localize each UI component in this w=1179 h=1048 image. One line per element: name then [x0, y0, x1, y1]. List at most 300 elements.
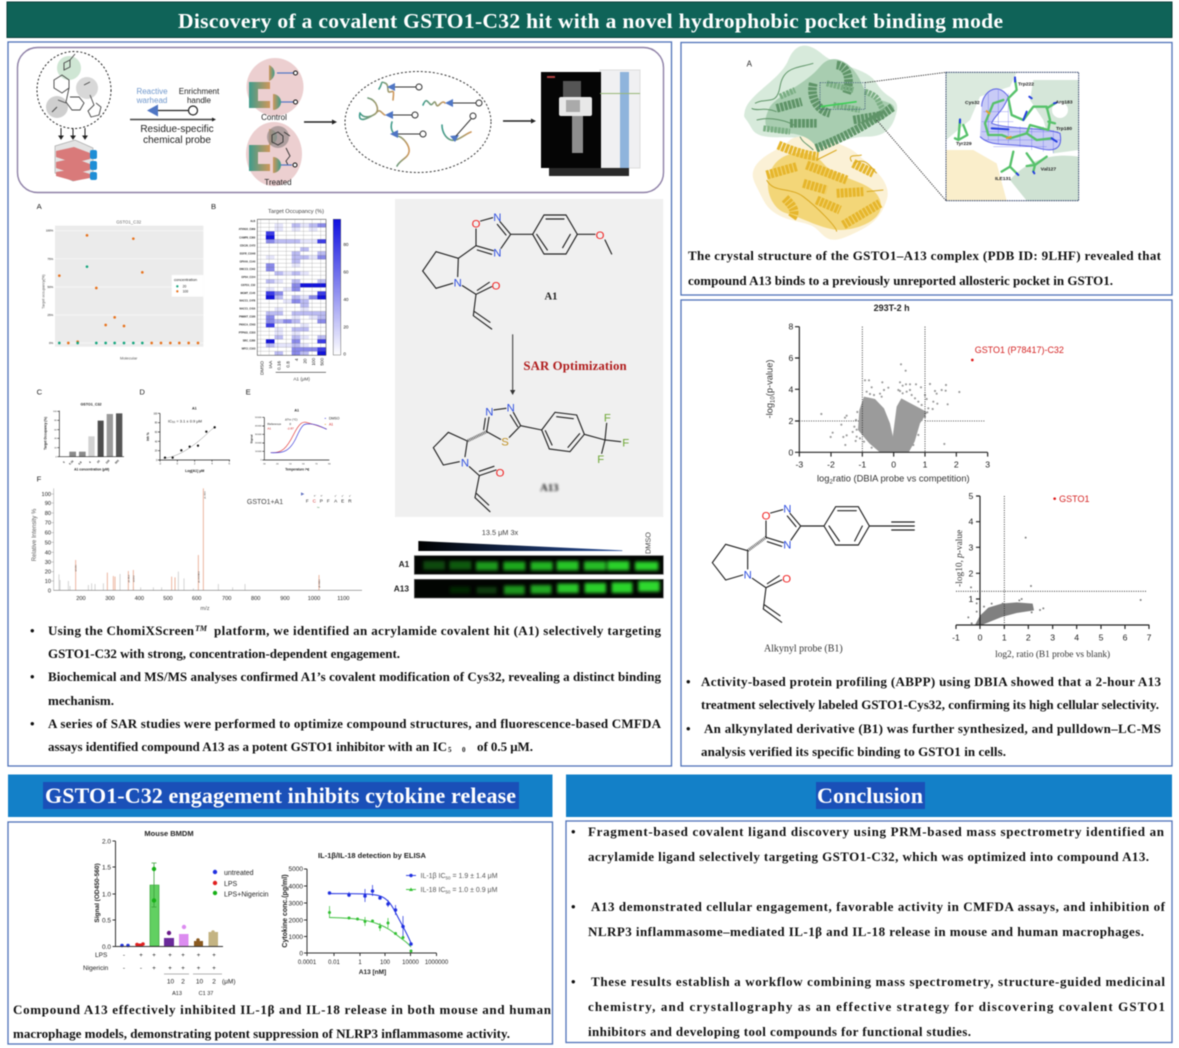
bar chart: Mouse BMDM: 2 — [212, 978, 216, 986]
volcano plot: 293T-2 h: -3 — [795, 460, 803, 470]
bar chart: Mouse BMDM — [83, 829, 269, 997]
scatter plot A: 50% — [47, 285, 54, 289]
thermal shift chart E: 400000 — [255, 426, 263, 428]
dose-response chart D: 4 — [211, 464, 213, 466]
bar chart C: 0.16 — [68, 459, 75, 466]
peptide sequence: y* — [335, 496, 337, 498]
panel: crystal structure: A — [747, 60, 753, 69]
caption: cytokine release: macrophage models, demonstrating potent suppression of NLRP3 inflammasome activity. — [13, 1026, 510, 1041]
bar chart C: 80 — [54, 420, 57, 422]
fluorescence gel: A13 — [394, 583, 409, 593]
legend: concentration: 100 — [183, 290, 188, 294]
conclusion bullets: acrylamide ligand selectively targeting GSTO1-C32, which was optimized into compound A13. — [588, 849, 1149, 864]
bullet list: discovery findings: 0 — [462, 746, 466, 754]
bar chart: Mouse BMDM: + — [197, 952, 201, 959]
bullet list: selectivity — [686, 674, 1162, 759]
heatmap B: MGMT_C145 — [240, 292, 256, 295]
volcano plot: B1 pulldown: 4 — [969, 517, 974, 527]
dose-response chart D: 60 — [155, 432, 158, 434]
MS/MS spectrum F: 1100 — [337, 596, 349, 602]
dose-response chart D: 2 — [194, 464, 196, 466]
MS/MS spectrum F: GSTO1+A1 — [247, 499, 283, 506]
dose-response chart D: D — [139, 388, 145, 397]
MS/MS spectrum F: 1000 — [308, 596, 320, 602]
compound A1 — [423, 212, 612, 329]
volcano plot: B1 pulldown — [952, 491, 1152, 660]
thermal shift chart E: 100000 — [255, 451, 263, 453]
heatmap B: 500 — [320, 357, 325, 366]
peptide sequence: b* — [314, 496, 316, 498]
MS/MS spectrum F: 70 — [45, 521, 51, 527]
bar chart C: 0 — [62, 460, 66, 464]
MS/MS spectrum F: 200 — [76, 596, 86, 602]
bar chart C: 20 — [54, 447, 57, 449]
MS/MS spectrum F: y5+ 623.3 — [204, 491, 206, 499]
compound A13: A13 — [540, 483, 559, 494]
dose-response chart D: 0 — [156, 460, 158, 462]
bar chart: Mouse BMDM: + — [181, 952, 185, 959]
residue-specific chemical probe: warhead — [136, 96, 167, 105]
MS/MS spectrum F: 20 — [45, 570, 51, 576]
dose-response chart D: 80 — [155, 423, 158, 425]
icon: mass spectrometer — [541, 70, 640, 176]
volcano plot: B1 pulldown: 6 — [1123, 633, 1128, 643]
volcano plot: 293T-2 h: log — [817, 474, 829, 484]
inset: binding pocket: ILE131 — [995, 176, 1011, 182]
peptide sequence: P — [320, 499, 323, 504]
panel: target engagement — [681, 300, 1172, 766]
scatter plot A: 0% — [49, 341, 54, 345]
page title banner: Discovery of a covalent GSTO1-C32 hit with a novel hydrophobic pocket binding mode — [178, 9, 1003, 33]
peptide sequence: F — [306, 499, 309, 504]
volcano plot: B1 pulldown: GSTO1 — [1059, 494, 1089, 504]
inset: binding pocket: Tyr229 — [956, 141, 972, 147]
bullet list: discovery findings: platform, we identified an acrylamide covalent hit (A1) selectively targeting — [214, 623, 662, 638]
MS/MS spectrum F: 40 — [45, 550, 51, 556]
peptide sequence — [301, 492, 352, 509]
bar chart: Mouse BMDM: (μM) — [222, 978, 236, 986]
heatmap B: CAMP8_C360 — [239, 236, 256, 239]
MS/MS spectrum F: 10 — [45, 579, 51, 585]
dose-response chart D: A1 — [192, 407, 197, 411]
heatmap B: PTPN11_C333 — [239, 331, 256, 334]
fluorescence gel: 13.5 μM 3x — [482, 528, 519, 537]
heatmap B: 0.8 — [285, 361, 290, 368]
legend: concentration — [172, 275, 203, 297]
volcano plot: 293T-2 h: 3 — [985, 460, 990, 470]
heatmap B: 0.16 — [277, 361, 282, 370]
bar chart: Mouse BMDM: Nigericin — [83, 965, 109, 972]
arrows: library to cells — [59, 128, 87, 139]
caption: cytokine release — [13, 1002, 552, 1041]
treated condition — [246, 122, 302, 187]
bar chart C: 20 — [96, 459, 101, 464]
scatter plot A: 100% — [46, 229, 54, 233]
scatter plot A — [37, 202, 203, 361]
bar chart C: A1 concentration (μM) — [74, 468, 109, 472]
bar chart: Mouse BMDM: + — [168, 952, 172, 959]
MS/MS spectrum F: Relative Intensity % — [32, 508, 38, 561]
scatter plot A: A — [37, 202, 43, 211]
MS/MS spectrum F: 300 — [105, 596, 115, 602]
bar chart: Mouse BMDM: Mouse BMDM — [144, 829, 194, 838]
section header: cytokine release: GSTO1-C32 engagement inhibits cytokine release — [45, 783, 516, 808]
bullet list: selectivity: treatment selectively labeled GSTO1-Cys32, confirming its high cellular selectivity. — [701, 697, 1159, 712]
bar chart: Mouse BMDM: + — [197, 965, 201, 972]
peptide sequence: R — [348, 499, 352, 504]
dose-response chart D: 20 — [155, 451, 158, 453]
line chart: ELISA — [282, 851, 498, 976]
line chart: ELISA: 3000 — [289, 900, 303, 908]
bar chart C: 4 — [88, 460, 92, 464]
volcano plot: B1 pulldown: 3 — [1050, 633, 1055, 643]
compound A13: F — [597, 454, 604, 466]
caption: crystal structure — [688, 248, 1162, 288]
bullet list: selectivity: An alkynylated derivative (B1) was further synthesized, and pulldown–LC-MS — [704, 721, 1161, 736]
bar chart: Mouse BMDM: + — [152, 965, 156, 972]
compound A13: N — [507, 402, 515, 414]
bullet list: selectivity: Activity-based protein profiling (ABPP) using DBIA showed that a 2-hour A13 — [701, 674, 1162, 689]
section header: conclusion: Conclusion — [817, 783, 923, 808]
legend: treatment — [213, 870, 269, 898]
MS/MS spectrum F: 900 — [280, 596, 290, 602]
heatmap B: ALB — [250, 220, 256, 223]
bar chart: Mouse BMDM: C1 37 — [199, 991, 213, 997]
bar chart: Mouse BMDM: + — [168, 965, 172, 972]
line chart: ELISA: 1 — [358, 960, 362, 966]
thermal shift chart E: Signal — [250, 434, 254, 443]
heatmap B: GPS4_C154 — [241, 276, 256, 279]
bullet list: discovery findings: • — [30, 669, 35, 684]
colorbar: 40 — [343, 297, 349, 302]
bullet list: discovery findings: assays identified compound A13 as a potent GSTO1 inhibitor with an IC — [48, 739, 447, 754]
icon: stacked cell culture flasks — [55, 140, 97, 181]
dose-response chart D: 0 — [177, 464, 179, 466]
bar chart: Mouse BMDM: 10 — [196, 978, 203, 986]
inset: binding pocket: Arg183 — [1056, 99, 1073, 105]
gel row A13 — [414, 579, 663, 598]
compound A1: O — [472, 218, 481, 230]
compound A1: O — [492, 281, 501, 293]
line chart: ELISA: A13 [nM] — [359, 969, 386, 976]
MS/MS spectrum F: F — [37, 474, 42, 483]
heatmap B: PNMKT_C186 — [239, 316, 256, 319]
thermal shift chart E: 80 — [328, 464, 331, 466]
conclusion bullets: inhibitors and developing tool compounds for functional studies. — [588, 1024, 971, 1039]
caption: cytokine release: Compound A13 effectively inhibited IL-1β and IL-18 release in both mouse and human — [13, 1002, 552, 1017]
MS/MS spectrum F: 500 — [163, 596, 173, 602]
bullet list: discovery findings: of 0.5 μM. — [477, 739, 533, 754]
compound A13: F — [622, 437, 629, 449]
bar chart: Mouse BMDM: A13 — [172, 991, 182, 997]
thermal shift chart E: 70 — [315, 464, 318, 466]
control condition — [246, 58, 304, 122]
bar chart: Mouse BMDM: 10 — [167, 978, 174, 986]
conclusion bullets: • — [571, 899, 576, 914]
caption: crystal structure: compound A13 binds to a previously unreported allosteric pocket in GSTO1. — [688, 273, 1113, 288]
volcano plot: 293T-2 h: 0 — [789, 447, 794, 457]
conclusion bullets — [571, 824, 1166, 1039]
heatmap B: NACC1_C478 — [239, 300, 256, 303]
compound A13: O — [496, 467, 505, 479]
conclusion bullets: NLRP3 inflammasome–mediated IL-1β and IL-18 release in mouse and human macrophages. — [588, 924, 1144, 939]
compound A13: N — [485, 407, 493, 419]
legend: IC50: = 1.9 ± 1.4 μM — [451, 873, 498, 880]
bullet list: discovery findings: Biochemical and MS/MS analyses confirmed A1’s covalent modification of Cys32, revealing a distinct binding — [48, 669, 662, 684]
heatmap B: WFCI_C163 — [242, 347, 256, 350]
legend: IC50: 50 — [446, 876, 451, 880]
thermal shift chart E: 50 — [289, 464, 292, 466]
heatmap B: CDC26_C472 — [240, 244, 256, 247]
line chart: ELISA: 5000 — [289, 866, 303, 873]
volcano plot: B1 pulldown: -1 — [952, 633, 960, 643]
dose-response chart D: IC₅₀ = 3.1 ± 0.9 μM — [168, 419, 202, 424]
scatter plot A: 25% — [47, 313, 54, 317]
workflow schematic — [18, 48, 664, 192]
conclusion bullets: Fragment-based covalent ligand discovery using PRM-based mass spectrometry identified an — [588, 824, 1165, 839]
bullet list: discovery findings: Using the ChomiXScreen — [48, 623, 195, 638]
legend: treatment: LPS+Nigericin — [224, 892, 269, 898]
dose-response chart D — [139, 388, 231, 473]
line chart: ELISA: 0.0001 — [298, 960, 317, 966]
thermal shift chart E: A1 — [294, 409, 299, 413]
bar chart: Mouse BMDM: - — [123, 965, 125, 972]
line chart: ELISA: 1000000 — [425, 960, 449, 966]
panel: cytokine release — [8, 822, 552, 1044]
thermal shift chart E: ΔTm (°C) — [285, 417, 297, 421]
line chart: ELISA: IL-1β/IL-18 detection by ELISA — [318, 851, 427, 860]
heatmap B: B — [211, 202, 216, 211]
MS/MS spectrum F: b3 377.2 — [133, 575, 135, 582]
volcano plot: 293T-2 h: GSTO1 (P78417)-C32 — [975, 345, 1064, 355]
inset: binding pocket: Trp222 — [1018, 82, 1034, 88]
dose-response chart D: Inh % — [146, 432, 150, 441]
section header: cytokine release — [8, 774, 552, 817]
residue-specific chemical probe: Reactive — [136, 87, 168, 96]
MS/MS spectrum F: 400 — [135, 596, 144, 602]
bar chart: Mouse BMDM: 1.0 — [102, 892, 111, 898]
inset: binding pocket: Val127 — [1041, 167, 1056, 173]
heatmap B: NACC1_C416 — [239, 308, 256, 311]
volcano plot: 293T-2 h: 1 — [923, 460, 928, 470]
heatmap B: GSTO1_C32 — [241, 284, 256, 287]
inset: binding pocket: Cys32 — [965, 100, 980, 106]
gel row A1 — [414, 556, 663, 574]
volcano plot: 293T-2 h: 2 — [954, 460, 959, 470]
scatter plot A: Target occupancy(%) — [42, 274, 46, 309]
thermal shift chart E: 0 — [289, 422, 291, 426]
colorbar: 60 — [343, 270, 349, 275]
residue-specific chemical probe: handle — [187, 96, 212, 105]
residue-specific chemical probe: chemical probe — [143, 135, 211, 146]
peptide sequence: b* — [321, 496, 323, 498]
conclusion bullets: These results establish a workflow combining mass spectrometry, structure-guided medicinal — [591, 974, 1165, 989]
bar chart: Mouse BMDM: Signal (OD450-560) — [94, 863, 101, 923]
bar chart C: C — [37, 388, 43, 397]
bullet list: discovery findings: • — [30, 716, 35, 731]
thermal shift chart E: 0 — [261, 460, 263, 462]
volcano plot: B1 pulldown: 1 — [969, 594, 974, 604]
thermal shift chart E — [246, 388, 340, 472]
control condition: Control — [261, 113, 287, 122]
panel: conclusion — [566, 821, 1172, 1042]
volcano plot: B1 pulldown: 3 — [969, 542, 974, 552]
thermal shift chart E: 60 — [302, 464, 305, 466]
peptide sequence: F — [327, 499, 330, 504]
compound A13 — [433, 402, 629, 512]
peptide sequence: C — [313, 499, 317, 504]
volcano plot: 293T-2 h: 0 — [891, 460, 896, 470]
conclusion bullets: • — [571, 824, 576, 839]
residue-specific chemical probe: Residue-specific — [140, 124, 214, 135]
scatter plot A: 75% — [47, 257, 54, 261]
heatmap B: PKKCA_C563 — [239, 323, 256, 326]
bar chart: Mouse BMDM: + — [139, 952, 143, 959]
arrow: SAR optimization — [510, 334, 627, 395]
compound A13: S — [501, 437, 509, 449]
bar chart C: GSTO1_C32 — [80, 403, 102, 407]
thermal shift chart E: A1 — [329, 422, 333, 426]
conclusion bullets: chemistry, and crystallography as an effective strategy for discovering covalent GSTO1 — [588, 999, 1165, 1014]
bullet list: selectivity: • — [686, 721, 691, 736]
thermal shift chart E: A1 — [267, 426, 271, 430]
MS/MS spectrum F: 600 — [192, 596, 201, 602]
volcano plot: B1 pulldown: 5 — [969, 491, 974, 501]
inset: binding pocket — [946, 72, 1079, 201]
heatmap B: Target Occupancy (%) — [268, 209, 324, 215]
fluorescence gel — [394, 528, 663, 598]
compound A1: N — [493, 212, 501, 224]
volcano plot: B1 pulldown: -log10, p-value — [955, 530, 965, 587]
inset: binding pocket: Trp180 — [1056, 126, 1072, 132]
volcano plot: 293T-2 h: 4 — [789, 384, 794, 394]
MS/MS spectrum F: 80 — [45, 511, 51, 517]
bar chart C: 0 — [55, 456, 57, 458]
volcano plot: 293T-2 h: 2 — [829, 480, 833, 486]
MS/MS spectrum F: 50 — [45, 540, 51, 546]
thermal shift chart E: -2.87 — [287, 426, 294, 430]
compound A1: N — [454, 277, 462, 289]
bullet list: selectivity: • — [686, 674, 691, 689]
bar chart: Mouse BMDM: 0.5 — [102, 918, 111, 924]
labeled peptide pool — [345, 72, 491, 172]
bullet list: selectivity: analysis verified its specific binding to GSTO1 in cells. — [701, 744, 1006, 759]
dose-response chart D: 100 — [153, 413, 158, 415]
panel: discovery of covalent hit — [8, 42, 672, 766]
scatter plot A: GSTO1_C32 — [116, 220, 142, 225]
alkynyl probe B1: N — [744, 569, 752, 581]
thermal shift chart E: 300000 — [255, 434, 263, 436]
section header: conclusion — [566, 774, 1172, 817]
bar chart: Mouse BMDM: - — [140, 965, 142, 972]
dotted zoom lines — [865, 72, 946, 201]
bar chart C: 60 — [54, 429, 57, 431]
bullet list: discovery findings: 5 — [448, 746, 452, 754]
colorbar: 20 — [343, 324, 349, 329]
line chart: ELISA: 4000 — [289, 884, 303, 890]
alkynyl probe B1: O — [762, 510, 771, 522]
thermal shift chart E: 40 — [276, 464, 279, 466]
volcano plot: 293T-2 h: (p-value) — [765, 359, 775, 396]
heatmap B: A1 (μM) — [293, 376, 310, 381]
icon: fragment library circle — [37, 52, 111, 128]
legend: IC50 — [406, 873, 498, 894]
heatmap B: EGFR_C1048 — [240, 252, 256, 255]
panel: crystal structure — [681, 42, 1172, 295]
residue-specific chemical probe: Enrichment — [179, 87, 220, 96]
dose-response chart D: 6 — [229, 464, 231, 466]
bar chart C: Target Occupancy (%) — [43, 417, 47, 450]
volcano plot: B1 pulldown: 7 — [1147, 633, 1152, 643]
MS/MS spectrum F: b2 178.1 — [75, 565, 77, 571]
bar chart: Mouse BMDM: + — [212, 952, 216, 959]
fluorescence gel: A1 — [399, 559, 410, 569]
line chart: ELISA: 10000 — [402, 960, 420, 966]
peptide sequence: A — [334, 499, 338, 504]
volcano plot: B1 pulldown: log2, ratio (B1 probe vs blank) — [995, 649, 1110, 660]
arrow to labeled peptides — [304, 120, 337, 124]
legend: concentration: 20 — [183, 285, 187, 289]
bar chart C: 0.8 — [77, 460, 83, 466]
peptide sequence: bn — [317, 507, 319, 509]
volcano plot: 293T-2 h: ratio (DBIA probe vs competition) — [833, 474, 970, 484]
legend: treatment: LPS — [224, 881, 238, 888]
conclusion bullets: • — [571, 974, 576, 989]
volcano plot: 293T-2 h: 293T-2 h — [874, 303, 910, 313]
volcano plot: B1 pulldown: 2 — [969, 568, 974, 578]
bar chart: Mouse BMDM: - — [123, 952, 125, 959]
bar chart: Mouse BMDM: + — [152, 952, 156, 959]
thermal shift chart E: DMSO — [329, 416, 340, 420]
heatmap B: ATXN10_C969 — [239, 228, 256, 231]
heatmap B: IAA — [268, 360, 273, 368]
scatter plot A: Molecular — [120, 356, 138, 361]
volcano plot: 293T-2 h: -2 — [827, 460, 835, 470]
treated condition: Treated — [264, 178, 292, 187]
legend: IC50: IL-1β IC — [420, 873, 446, 880]
bar chart: Mouse BMDM: 2 — [181, 978, 185, 986]
bar chart C: 100 — [53, 411, 57, 413]
bar chart: Mouse BMDM: LPS — [95, 952, 108, 959]
volcano plot: 293T-2 h: -1 — [858, 460, 866, 470]
legend: concentration: concentration — [174, 278, 197, 282]
MS/MS spectrum F: y5+-NH3 606.3 — [198, 571, 200, 583]
bar chart: Mouse BMDM: + — [212, 965, 216, 972]
alkynyl probe B1 — [712, 504, 914, 655]
peptide sequence: E — [341, 499, 344, 504]
bullet list: discovery findings: A series of SAR studies were performed to optimize compound structures, and fluorescence-based CMFDA — [48, 716, 662, 731]
bar chart C: 40 — [54, 438, 57, 440]
heatmap B: 100 — [311, 357, 316, 366]
volcano plot: B1 pulldown: 4 — [1074, 633, 1079, 643]
bar chart: Mouse BMDM: 1.5 — [102, 864, 111, 872]
line chart: ELISA: 0.01 — [328, 960, 340, 966]
heatmap B: SRC_C280 — [243, 339, 256, 342]
heatmap B — [211, 202, 349, 381]
alkynyl probe B1: N — [783, 504, 791, 516]
peptide sequence: y* — [349, 496, 351, 498]
fluorescence gel: DMSO — [644, 532, 653, 554]
arrow to mass spectrometer — [503, 118, 536, 124]
peptide sequence: y* — [342, 496, 344, 498]
volcano plot: 293T-2 h: 2 — [789, 416, 794, 426]
MS/MS spectrum F: 60 — [45, 531, 51, 537]
dose-response chart D: -2 — [159, 464, 162, 466]
MS/MS spectrum F: 30 — [45, 560, 51, 566]
line chart: ELISA: 100 — [380, 960, 391, 966]
volcano plot: 293T-2 h: 6 — [789, 353, 794, 363]
charts A-B — [37, 202, 349, 381]
